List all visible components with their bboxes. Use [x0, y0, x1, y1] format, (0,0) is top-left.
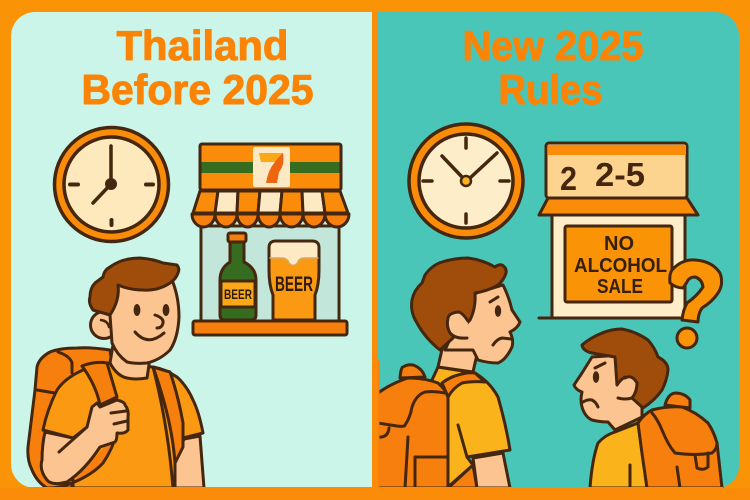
logo: number 7: [253, 147, 290, 187]
right arm: [175, 436, 204, 488]
sign: no alcohol sale: SALE: [597, 276, 643, 298]
store body: [552, 212, 685, 318]
shelf: [193, 321, 347, 335]
panel: before 2025: [11, 12, 372, 488]
title: Thailand Before 2025: Before 2025: [82, 66, 314, 113]
child shirt: [590, 423, 647, 488]
shirt: [43, 363, 203, 488]
title: New 2025 Rules: Rules: [498, 66, 602, 113]
title: New 2025 Rules: New 2025: [462, 22, 644, 69]
store sign with partial hours: 2: [560, 160, 577, 197]
beer bottle: [220, 233, 256, 320]
pack lower edge: [47, 433, 117, 488]
sign: no alcohol sale: NO: [604, 233, 634, 255]
sign: no alcohol sale: ALCOHOL: [574, 255, 667, 277]
child ear: [618, 377, 637, 399]
sign: no alcohol sale: [565, 226, 672, 302]
adult backpack: [378, 365, 448, 488]
backpack: [28, 348, 120, 488]
character: smiling traveller with backpack: [28, 258, 204, 488]
eyes: [134, 304, 140, 316]
adult neck: [438, 345, 478, 372]
hair: [89, 258, 179, 315]
icon: question mark: [670, 260, 722, 348]
character: worried child from the side: [574, 329, 722, 488]
adult face: [445, 285, 520, 363]
icon: clock showing seven o'clock: [54, 128, 168, 242]
child hair: [582, 329, 668, 408]
title: Thailand Before 2025: Thailand: [116, 22, 288, 69]
beer glass: BEER: [275, 273, 313, 296]
neck: [110, 345, 150, 379]
awning: [192, 191, 349, 227]
store awning: [539, 198, 698, 215]
child backpack: [638, 393, 722, 488]
orange behind shirt: [448, 465, 477, 488]
beer bottle: BEER: [224, 286, 252, 302]
adult hair: [412, 258, 506, 350]
store sign with partial hours: 2-5: [595, 156, 645, 193]
ear: [90, 312, 118, 338]
adult shirt: [432, 367, 510, 487]
closed store: [539, 143, 698, 318]
straps: [82, 362, 117, 405]
beer glass: [269, 241, 319, 320]
store: convenience shop: [192, 144, 349, 335]
title: Thailand Before 2025: [82, 22, 314, 113]
face: [110, 280, 179, 363]
child face: [574, 355, 642, 430]
left arm and hand: [41, 400, 128, 484]
store sign with partial hours: [546, 143, 687, 198]
store sign: [200, 144, 341, 190]
character: worried adult from the side: [378, 258, 520, 488]
store window: [201, 226, 339, 322]
icon: clock at ten past ten: [409, 124, 523, 238]
nose and smile: [135, 315, 164, 340]
adult expression: [490, 297, 511, 345]
panel: new 2025 rules: [378, 12, 739, 488]
adult arm: [473, 453, 510, 488]
title: New 2025 Rules: [462, 22, 644, 113]
child expression: [583, 363, 605, 407]
adult ear: [447, 312, 468, 338]
